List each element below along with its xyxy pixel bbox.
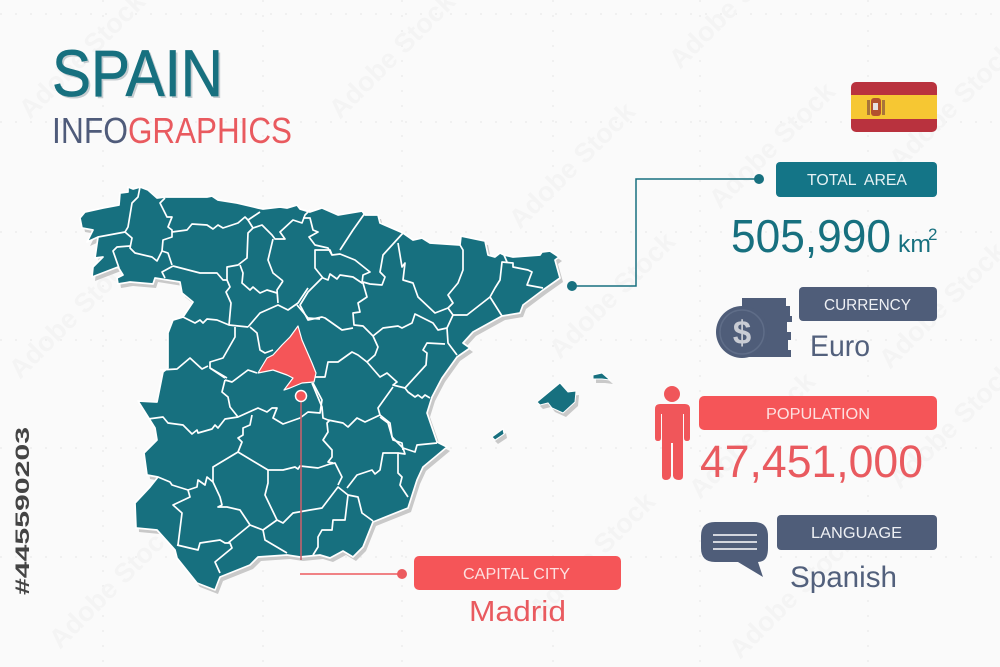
- icon: speech bubble: [701, 522, 768, 577]
- currency label: [799, 287, 937, 321]
- icon: coins: $: [733, 314, 751, 351]
- flag of Spain: [851, 82, 937, 132]
- text: Adobe Stock: [503, 96, 642, 234]
- title: SPAIN: [54, 38, 225, 112]
- province borders: [98, 187, 543, 573]
- map of Spain: [80, 187, 613, 594]
- total area connector: [567, 174, 764, 291]
- capital city label: CAPITAL CITY: [463, 566, 570, 583]
- Madrid region: [258, 326, 316, 390]
- total area value: km: [898, 231, 931, 258]
- total area value: 505,990: [731, 210, 891, 262]
- language label: [777, 515, 937, 550]
- total area label: [776, 162, 937, 197]
- icon: person: [655, 386, 690, 480]
- capital value: Madrid: [469, 596, 566, 628]
- text: Adobe Stock: [523, 486, 662, 624]
- total area label: TOTAL AREA: [807, 172, 907, 189]
- population label: [699, 396, 937, 430]
- stock id text: #445590203: [13, 427, 34, 595]
- population label: POPULATION: [766, 406, 870, 423]
- language label: LANGUAGE: [811, 525, 902, 542]
- subtitle: INFO: [52, 110, 128, 151]
- currency label: CURRENCY: [824, 297, 911, 314]
- text: Adobe Stock: [43, 516, 182, 654]
- text: Adobe Stock: [703, 76, 842, 214]
- subtitle: [52, 110, 292, 151]
- subtitle: GRAPHICS: [128, 110, 292, 151]
- text: Adobe Stock: [3, 246, 142, 384]
- text: Adobe Stock: [683, 366, 822, 504]
- mainland: [80, 187, 560, 590]
- total area value: 2: [928, 225, 937, 244]
- text: Adobe Stock: [543, 226, 682, 364]
- icon: coins: [716, 298, 792, 358]
- title: SPAIN: [52, 36, 223, 110]
- capital city pointer: [296, 390, 407, 579]
- text: Adobe Stock: [723, 526, 862, 664]
- Balearic islands: [492, 373, 610, 440]
- map shadow: [83, 191, 613, 594]
- language value: Spanish: [790, 561, 897, 594]
- population value: 47,451,000: [700, 436, 923, 487]
- currency value: Euro: [810, 330, 870, 363]
- capital city label: [414, 556, 621, 590]
